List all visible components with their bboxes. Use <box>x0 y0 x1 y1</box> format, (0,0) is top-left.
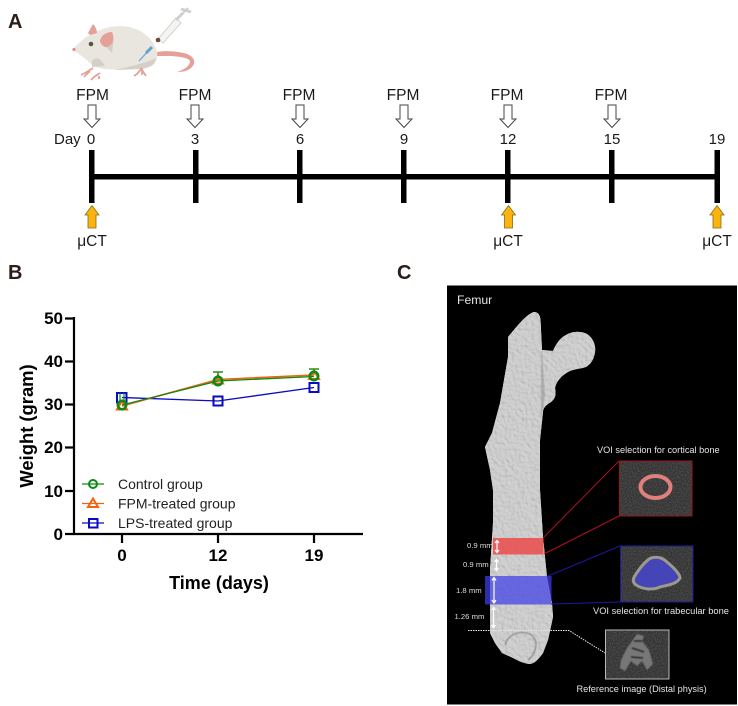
legend: FPM-treated group <box>118 496 236 512</box>
day labels: 12 <box>500 131 516 148</box>
panel label A: A <box>8 11 22 33</box>
x axis title: Time (days) <box>169 573 269 593</box>
legend <box>82 476 236 531</box>
FPM labels: FPM <box>76 87 109 104</box>
y tick labels: 20 <box>44 438 63 457</box>
measurement labels: 0.9 mm <box>463 560 489 569</box>
distal condyle shading <box>505 632 536 660</box>
measurement labels: 1.26 mm <box>454 612 484 621</box>
FPM labels: FPM <box>283 87 315 104</box>
series: control group <box>118 369 319 409</box>
timeline axis <box>89 150 720 203</box>
series: FPM-treated group <box>117 369 319 410</box>
panel label B: B <box>8 262 22 284</box>
day labels: 9 <box>400 131 408 148</box>
y tick labels: 0 <box>54 525 63 544</box>
y tick labels <box>44 309 63 544</box>
FPM labels: FPM <box>179 87 211 104</box>
uCT labels: μCT <box>493 233 523 250</box>
FPM labels: FPM <box>387 87 419 104</box>
uCT labels: μCT <box>702 233 732 250</box>
panel A: timeline <box>54 8 732 250</box>
day labels <box>54 131 725 148</box>
femur bone <box>485 312 595 664</box>
x tick labels: 12 <box>209 546 227 565</box>
blue VOI band <box>485 576 552 604</box>
y tick labels: 50 <box>44 309 63 328</box>
bone neck shading <box>541 350 545 420</box>
day labels: Day <box>54 131 81 148</box>
day labels: 15 <box>604 131 620 148</box>
panel B: weight line chart <box>16 309 363 593</box>
cortical inset <box>620 461 692 516</box>
legend: LPS-treated group <box>118 515 233 531</box>
y tick labels: 30 <box>44 395 63 414</box>
series: LPS-treated group <box>117 383 318 406</box>
x tick labels: 0 <box>117 546 127 565</box>
uCT labels: μCT <box>77 233 107 250</box>
trabecular inset <box>620 546 693 602</box>
measurement labels <box>454 541 493 621</box>
blue connector lines <box>548 546 620 604</box>
y tick labels: 40 <box>44 352 63 371</box>
cortical caption: VOI selection for cortical bone <box>597 445 720 455</box>
measurement arrows <box>492 540 499 628</box>
trabecular caption: VOI selection for trabecular bone <box>593 606 729 616</box>
icon: mouse with syringe <box>72 8 194 80</box>
red VOI band <box>493 538 544 554</box>
day labels: 19 <box>709 131 725 148</box>
uCT labels <box>77 233 732 250</box>
panel C: femur micro-CT <box>447 286 737 704</box>
FPM labels <box>76 87 627 104</box>
x tick labels <box>117 546 323 565</box>
femur title: Femur <box>457 293 492 307</box>
panel label C: C <box>397 262 411 284</box>
yellow uCT arrows <box>85 206 724 228</box>
black background <box>447 286 737 704</box>
reference caption: Reference image (Distal physis) <box>576 684 707 694</box>
reference inset <box>606 630 669 679</box>
legend: Control group <box>118 476 203 492</box>
y axis title: Weight (gram) <box>16 364 37 488</box>
y tick labels: 10 <box>44 482 63 501</box>
FPM labels: FPM <box>595 87 627 104</box>
x tick labels: 19 <box>305 546 323 565</box>
FPM down arrows <box>84 105 620 128</box>
measurement labels: 1.8 mm <box>456 586 482 595</box>
measurement labels: 0.9 mm <box>467 541 493 550</box>
reference dotted line <box>468 630 605 653</box>
axes <box>65 317 363 543</box>
red connector lines <box>543 461 619 554</box>
day labels: 0 <box>87 131 95 148</box>
day labels: 3 <box>191 131 199 148</box>
FPM labels: FPM <box>491 87 523 104</box>
day labels: 6 <box>296 131 304 148</box>
